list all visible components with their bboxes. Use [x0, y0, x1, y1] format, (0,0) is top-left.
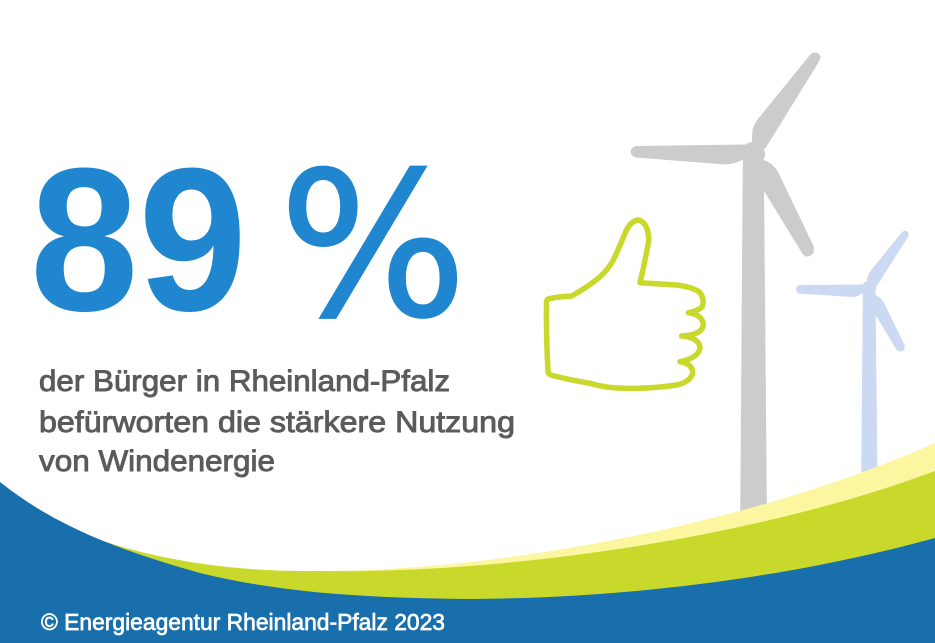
band: pale yellow swoosh	[317, 443, 935, 600]
line 1: der Bürger in Rheinland-Pfalz	[39, 365, 450, 398]
percent sign: %	[279, 130, 467, 363]
headline number: 89 %	[30, 126, 467, 363]
icon: small wind turbine	[796, 231, 908, 480]
line 3: von Windenergie	[39, 445, 275, 478]
band: blue footer wave	[0, 482, 935, 643]
icon: thumbs up	[546, 220, 703, 388]
description text	[39, 365, 515, 478]
band: lime green swoosh	[100, 471, 935, 643]
icon: large wind turbine	[631, 53, 820, 520]
copyright footer: © Energieagentur Rheinland-Pfalz 2023	[41, 609, 445, 635]
line 2: befürworten die stärkere Nutzung	[39, 406, 515, 439]
digits: 89	[30, 126, 247, 354]
